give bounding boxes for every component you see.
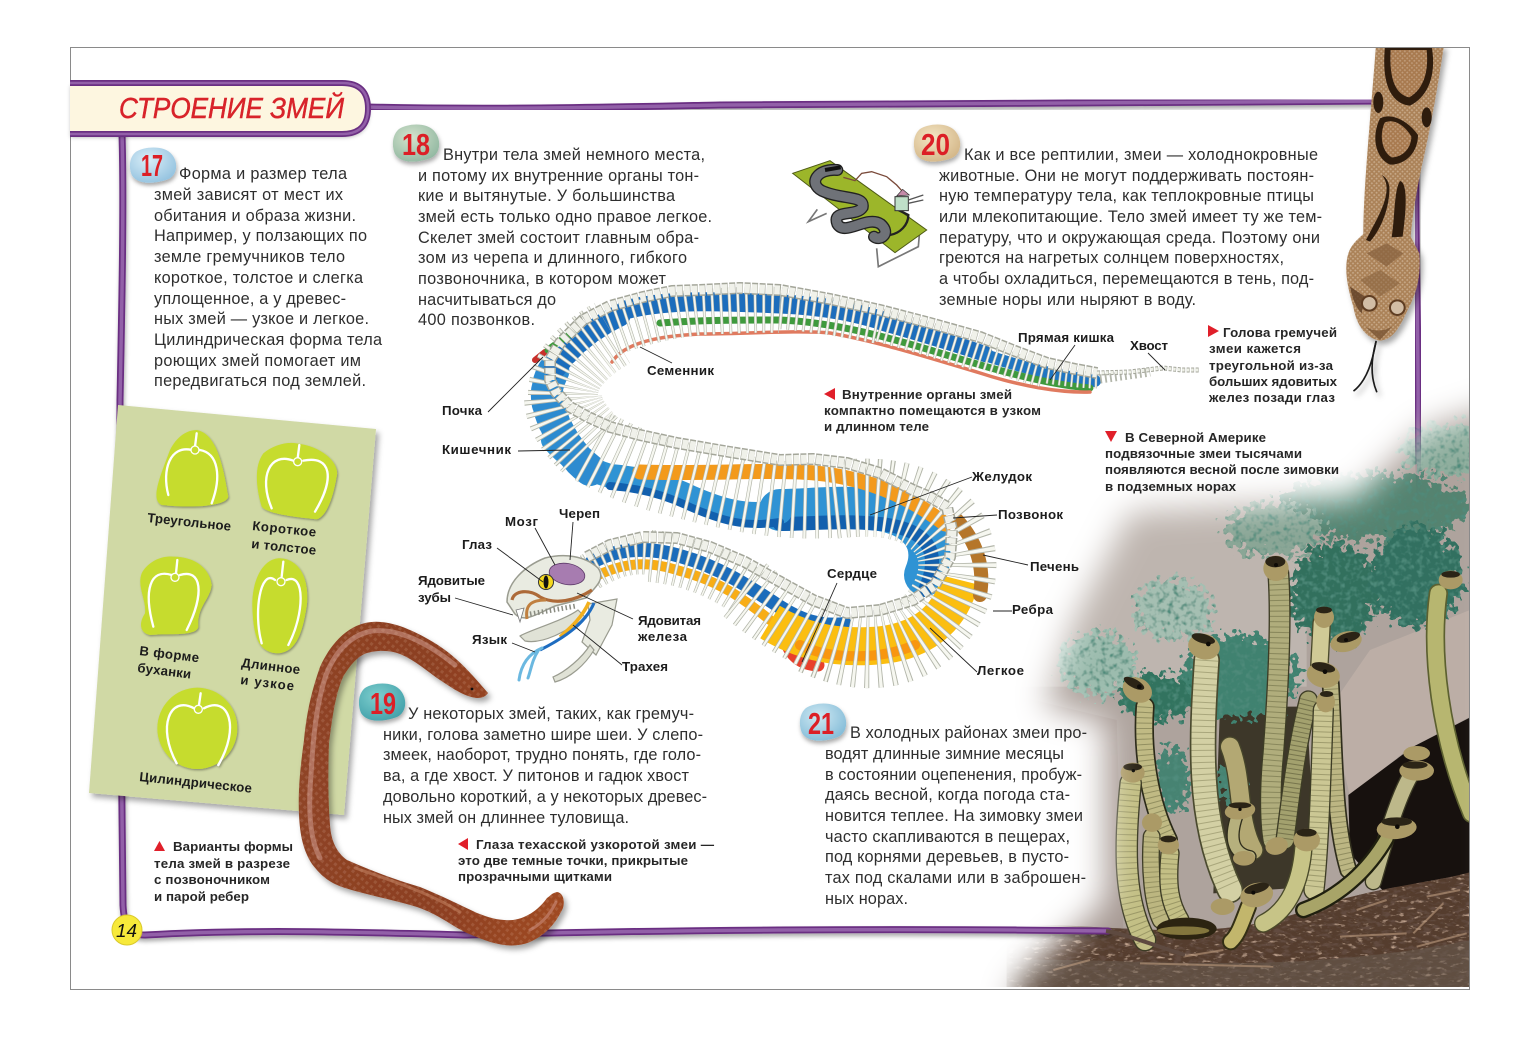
text block 18: Скелет змей состоит главным обра- (418, 229, 699, 247)
diagram labels: Хвост (1130, 338, 1168, 353)
caption: Texas blind snake: это две темные точки, прикрытые (458, 853, 688, 868)
title banner (70, 83, 368, 134)
leader lines (455, 345, 1165, 672)
badge 18: 18 (402, 127, 430, 162)
text block 19: змеек, наоборот, трудно понять, где голо- (383, 746, 701, 764)
diagram labels: Кишечник (442, 442, 511, 457)
badge 17: 17 (141, 148, 163, 183)
brain (547, 561, 587, 587)
caption: rattlesnake head: больших ядовитых (1209, 374, 1338, 389)
text block 17: змей зависят от мест их (154, 186, 343, 204)
frame: left and bottom line (120, 134, 1108, 935)
caption: garter snakes: В Северной Америке (1125, 430, 1266, 445)
text block 19 (359, 683, 707, 827)
text block 18 (393, 124, 712, 329)
text block 20: греются на нагретых солнцем поверхностях, (939, 249, 1284, 267)
caption: rattlesnake head: змеи кажется (1209, 341, 1301, 356)
caption: organs: компактно помещаются в узком (824, 403, 1041, 418)
shape: short and thick (257, 443, 337, 519)
shape labels: Треугольное (147, 510, 232, 534)
shape: loaf (140, 556, 212, 635)
text block 19: довольно короткий, а у некоторых древес- (383, 788, 707, 806)
shape: cylindrical (157, 688, 237, 769)
shape labels: Цилиндрическое (139, 769, 253, 796)
badge 19 (359, 683, 405, 721)
text block 21 (800, 703, 1087, 908)
text block 17: ных змей — узкое и легкое. (154, 310, 369, 328)
diagram labels: Печень (1030, 559, 1079, 574)
caption: rattlesnake head: желез позади глаз (1208, 390, 1335, 405)
spine (550, 288, 1200, 613)
ribs (563, 310, 1150, 649)
diagram labels: Желудок (971, 469, 1032, 484)
text block 19: ники, голова заметно шире шеи. У слепо- (383, 726, 703, 744)
shape labels (137, 510, 317, 796)
orange upper band (640, 471, 945, 524)
heart (785, 638, 818, 665)
badge 21 (800, 703, 846, 741)
shape labels: В форме (139, 643, 200, 665)
trachea and oesophagus (560, 602, 589, 637)
text block 17: Форма и размер тела (179, 165, 348, 183)
caption: garter snakes: в подземных норах (1105, 479, 1237, 494)
anatomical snake diagram (418, 288, 1200, 682)
diagram labels: Легкое (977, 663, 1024, 678)
diagram labels: Язык (472, 632, 507, 647)
caption: Texas blind snake: Глаза техасской узкоротой змеи — (476, 837, 715, 852)
neck blue (592, 550, 845, 625)
diagram labels (418, 330, 1168, 678)
caption: organs: и длинном теле (824, 419, 929, 434)
caption: organs (824, 387, 1041, 434)
text block 20: животные. Они не могут поддерживать постоян- (939, 167, 1314, 185)
neck yellow (592, 564, 770, 620)
diagram labels: железа (637, 629, 688, 644)
ground (1007, 872, 1472, 990)
lung (770, 580, 960, 646)
caption: body shapes: тела змей в разрезе (154, 856, 290, 871)
caption: Texas blind snake: прозрачными щитками (458, 869, 612, 884)
text block 20: а чтобы охладиться, перемещаются в тень, под- (939, 270, 1314, 288)
text block 17: роющих змей помогает им (154, 352, 361, 370)
diagram labels: Трахея (622, 659, 668, 674)
caption: rattlesnake head (1208, 325, 1338, 405)
diagram labels: Ядовитые (418, 573, 485, 588)
plants (1058, 423, 1500, 813)
page number: 14 (116, 921, 137, 941)
skull (507, 556, 617, 682)
text block 21: водят длинные зимние месяцы (825, 745, 1064, 763)
badge 20: 20 (921, 127, 950, 162)
text block 21: часто скапливаются в пещерах, (825, 828, 1070, 846)
snake blotches (1366, 47, 1433, 242)
caption: body shapes: Варианты формы (173, 839, 293, 854)
text block 17: передвигаться под землей. (154, 372, 366, 390)
text block 18: кие и вытянутые. У большинства (418, 187, 676, 205)
text block 20: Как и все рептилии, змеи — холоднокровные (964, 146, 1318, 164)
frame: right line (1416, 150, 1420, 520)
text block 21: в состоянии оцепенения, пробуж- (825, 766, 1082, 784)
liver (957, 520, 981, 595)
text block 17: короткое, толстое и слегка (154, 269, 364, 287)
text block 21: под корнями деревьев, в пусто- (825, 848, 1069, 866)
text block 21: ных норах. (825, 890, 908, 908)
text block 19: ва, а где хвост. У питонов и гадюк хвост (383, 767, 690, 785)
photo background rock (996, 394, 1469, 987)
text block 17: Цилиндрическая форма тела (154, 331, 383, 349)
caption: rattlesnake head: Голова гремучей (1223, 325, 1337, 340)
snake heads (1118, 556, 1463, 940)
rock left (1105, 905, 1123, 928)
text block 18: зом из черепа и длинного, гибкого (418, 249, 687, 267)
caption: body shapes (154, 839, 293, 904)
tongue (519, 648, 542, 680)
panel: body cross-section shapes (89, 405, 376, 815)
shape labels: Длинное (241, 655, 301, 677)
diagram labels: Прямая кишка (1018, 330, 1115, 345)
diagram labels: зубы (418, 590, 451, 605)
text block 19: У некоторых змей, таких, как гремуч- (408, 705, 694, 723)
diagram labels: Почка (442, 403, 483, 418)
diagram labels: Глаз (462, 537, 492, 552)
diagram labels: Ядовитая (638, 613, 701, 628)
text block 18: и потому их внутренние органы тон- (418, 167, 699, 185)
rattlesnake illustration top right (1346, 45, 1444, 392)
text block 20: земные норы или ныряют в воду. (939, 291, 1196, 309)
diagram labels: Ребра (1012, 602, 1054, 617)
caption: rattlesnake head: треугольной из-за (1209, 358, 1334, 373)
shape labels: и толстое (251, 536, 317, 558)
caption: body shapes: с позвоночником (154, 872, 270, 887)
text block 20: или млекопитающие. Тело змей имеет ту же тем- (939, 208, 1322, 226)
text block 20: пературу, что и окружающая среда. Поэтому они (939, 229, 1320, 247)
text block 17: Например, у ползающих по (154, 227, 367, 245)
stomach and intestine (780, 508, 929, 575)
caption: organs: Внутренние органы змей (842, 387, 1012, 402)
far snakes (1127, 573, 1472, 942)
badge 20 (914, 124, 960, 162)
upper gut (625, 302, 880, 320)
shape labels: и узкое (240, 672, 295, 694)
head markings (1367, 243, 1403, 267)
cave (1348, 717, 1472, 895)
caption: Texas blind snake (458, 837, 715, 884)
caption: garter snakes: подвязочные змеи тысячами (1105, 446, 1302, 461)
caption: garter snakes (1105, 430, 1339, 494)
page number (112, 915, 142, 945)
diagram labels: Череп (559, 506, 600, 521)
shape labels: Короткое (252, 518, 317, 540)
horizontal snake on ground (1157, 918, 1217, 940)
caption: body shapes: и парой ребер (154, 889, 249, 904)
diagram labels: Мозг (505, 514, 538, 529)
diagram labels: Сердце (827, 566, 877, 581)
diagram labels: Семенник (647, 363, 714, 378)
text block 20 (914, 124, 1322, 309)
text block 18: позвоночника, в котором может (418, 270, 667, 288)
photo: garter snakes in spring (996, 394, 1469, 987)
badge 21: 21 (808, 706, 834, 741)
text block 21: В холодных районах змеи про- (850, 724, 1087, 742)
organs (535, 302, 1095, 665)
text block 18: Внутри тела змей немного места, (443, 146, 705, 164)
text block 21: тах под скалами или в заброшен- (825, 869, 1086, 887)
shape: long and narrow (252, 558, 307, 653)
text block 18: 400 позвонков. (418, 311, 535, 329)
badge 19: 19 (370, 686, 396, 721)
text block 18: змей есть только одно правое легкое. (418, 208, 712, 226)
badge 18 (393, 124, 439, 162)
rock right (1340, 610, 1470, 797)
text block 19: ных змей он длиннее туловища. (383, 809, 629, 827)
shape labels: буханки (137, 660, 192, 682)
shape: triangular (156, 430, 228, 507)
text block 17 (130, 147, 383, 390)
branch continuing the bottom line (1106, 931, 1185, 955)
text block 17: обитания и образа жизни. (154, 207, 356, 225)
venom gland (512, 590, 592, 601)
text block 17: земле гремучников тело (154, 248, 345, 266)
text block 18: насчитываться до (418, 291, 556, 309)
caption: garter snakes: появляются весной после зимовки (1105, 462, 1339, 477)
scale texture (1346, 45, 1444, 341)
eye (538, 574, 554, 590)
text block 20: ную температуру тела, как теплокровные птицы (939, 187, 1314, 205)
text block 21: даясь весной, когда погода ста- (825, 786, 1070, 804)
frame: top line (366, 101, 1380, 108)
twigs in ground (1053, 890, 1467, 970)
icon: snake sunbathing on a lounger (793, 161, 927, 267)
dark gaps (1213, 707, 1317, 893)
heading: СТРОЕНИЕ ЗМЕЙ (119, 92, 345, 125)
diagram labels: Позвонок (998, 507, 1063, 522)
text block 17: уплощенное, а у древес- (154, 290, 346, 308)
worm-like blind snake (299, 622, 564, 945)
text block 21: новится теплее. На зимовку змеи (825, 807, 1083, 825)
